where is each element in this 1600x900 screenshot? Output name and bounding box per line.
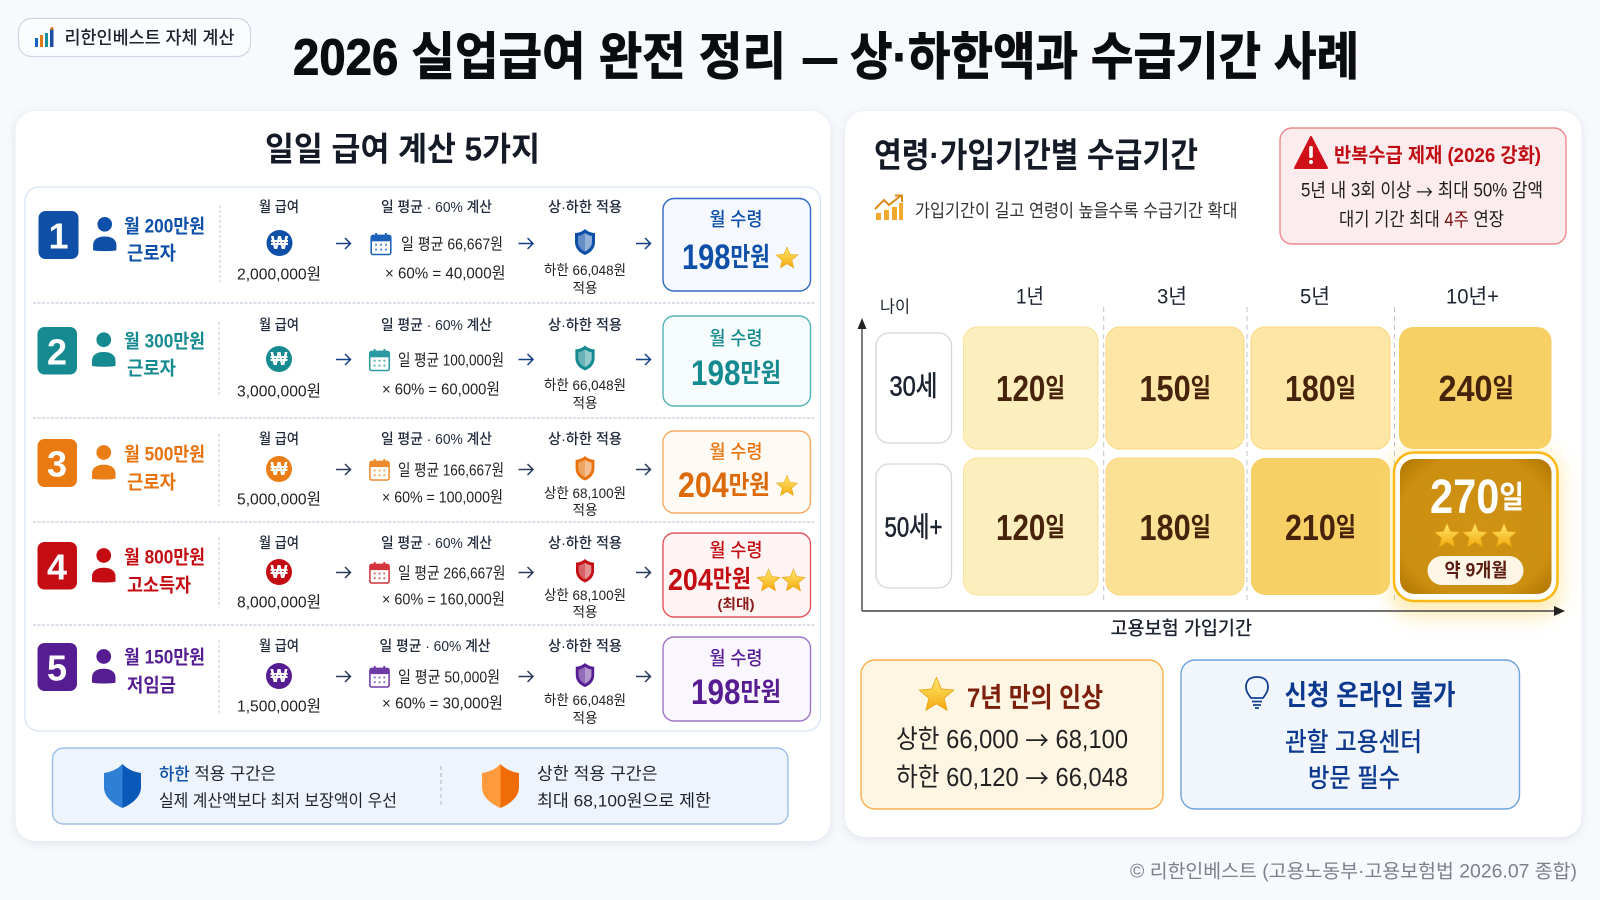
- daily average: [370, 638, 503, 712]
- three stars: [1435, 523, 1516, 547]
- daily average: × 60% = 60,000원: [382, 380, 500, 398]
- monthly pay: 월 급여: [259, 431, 299, 448]
- worker label: [124, 646, 205, 696]
- callout: repeat claim sanctions: 반복수급 제재 (2026 강화): [1334, 144, 1541, 167]
- cell 30세 10년: 240일: [1438, 368, 1514, 408]
- icon: person: [92, 548, 116, 583]
- lower limit note: 실제 계산액보다 최저 보장액이 우선: [159, 792, 397, 810]
- daily average: 일 평균 66,667원: [401, 236, 503, 254]
- monthly pay: 월 급여: [259, 535, 299, 552]
- daily average: 일 평균 · 60% 계산: [380, 638, 490, 655]
- limit applied: 상·하한 적용: [548, 317, 622, 334]
- result box: 월 수령: [710, 540, 762, 562]
- number badge 5: 5: [47, 648, 67, 688]
- limit applied: 하한 66,048원: [544, 262, 626, 278]
- result box: 월 수령: [710, 328, 762, 350]
- icon: star: [919, 678, 954, 710]
- age row 30: 30세: [890, 370, 938, 402]
- icon: person: [92, 649, 116, 684]
- limit applied: 상·하한 적용: [548, 431, 622, 448]
- monthly pay: ₩: [271, 233, 288, 253]
- result box: 198만원: [682, 238, 770, 276]
- panel: benefit duration: [845, 111, 1582, 837]
- monthly pay: [237, 431, 321, 508]
- limit applied: 적용: [572, 604, 598, 620]
- icon: orange shield: [482, 764, 519, 808]
- cell 30세 3년: 150일: [1140, 368, 1211, 408]
- callout: repeat claim sanctions: [1280, 128, 1566, 244]
- callout: repeat claim sanctions: 대기 기간 최대 4주 연장: [1339, 208, 1504, 230]
- number badge 4: [38, 542, 77, 590]
- daily average: [370, 535, 506, 608]
- lower limit note: [159, 764, 397, 810]
- worker label: 월 150만원: [124, 646, 205, 668]
- subtitle: 가입기간이 길고 연령이 높을수록 수급기간 확대: [915, 201, 1238, 221]
- arrow: [518, 464, 533, 475]
- worker label: [124, 330, 205, 380]
- cell 50세 3년: [1106, 458, 1244, 595]
- row 2: [33, 316, 814, 418]
- worker label: 월 800만원: [124, 546, 205, 568]
- column headers: 10년+: [1446, 286, 1499, 308]
- daily average: × 60% = 160,000원: [382, 590, 505, 608]
- callout: first raise in 7 years: 상한 66,000 → 68,100: [896, 720, 1128, 758]
- column headers: [1016, 286, 1499, 308]
- cell 50세 1년: 120일: [996, 506, 1065, 548]
- source badge: [18, 18, 250, 56]
- limit applied: 적용: [572, 710, 598, 726]
- monthly pay: 월 급여: [259, 199, 299, 216]
- callout: no online application: 신청 온라인 불가: [1284, 680, 1456, 710]
- row 3: [33, 431, 814, 522]
- arrow: [518, 567, 533, 578]
- result box: 198만원: [691, 354, 781, 392]
- arrow: [336, 238, 350, 249]
- callout: first raise in 7 years: 하한 60,120 → 66,048: [896, 758, 1128, 796]
- limit applied: 상·하한 적용: [548, 535, 622, 552]
- monthly pay: 월 급여: [259, 317, 299, 334]
- age row 50: [876, 464, 952, 588]
- upper limit note: 상한 적용 구간은: [537, 764, 658, 784]
- daily average: × 60% = 30,000원: [382, 694, 503, 712]
- monthly pay: [237, 638, 321, 716]
- daily average: 일 평균 · 60% 계산: [381, 535, 492, 552]
- cell 50세 1년: [964, 458, 1098, 595]
- limit applied: [544, 638, 626, 726]
- daily average: 일 평균 50,000원: [398, 668, 500, 686]
- number badge 5: [38, 643, 77, 691]
- heading: daily benefit calculation: 일일 급여 계산 5가지: [265, 130, 540, 168]
- daily average: [370, 317, 504, 398]
- age row 50: 50세+: [884, 512, 942, 542]
- daily average: 일 평균 · 60% 계산: [381, 199, 492, 216]
- cell 30세 1년: 120일: [996, 368, 1065, 408]
- number badge 1: [38, 211, 78, 259]
- cell 30세 5년: 180일: [1285, 368, 1356, 408]
- callout: no online application: [1181, 660, 1520, 809]
- icon: person: [93, 217, 116, 251]
- worker label: [124, 444, 205, 494]
- result box: 204만원: [668, 562, 751, 596]
- calculation table frame: [25, 187, 820, 731]
- upper limit note: 최대 68,100원으로 제한: [537, 792, 711, 810]
- footer source: © 리한인베스트 (고용노동부·고용보험법 2026.07 종합): [1130, 860, 1577, 882]
- highlighted cell 50세 10년: [1389, 448, 1562, 618]
- icon: growth chart: [875, 196, 903, 220]
- icon: light bulb: [1246, 677, 1268, 708]
- limit applied: 적용: [572, 502, 598, 518]
- number badge 3: [38, 439, 77, 487]
- cell 30세 10년: [1399, 327, 1552, 449]
- result box: [663, 637, 810, 721]
- result box: 월 수령: [710, 648, 762, 670]
- limit applied: [544, 535, 626, 620]
- axes: [858, 318, 1565, 616]
- monthly pay: 월 급여: [259, 638, 299, 655]
- limit applied: 하한 66,048원: [544, 692, 626, 708]
- limit applied: [544, 199, 626, 296]
- limit applied: 상한 68,100원: [544, 587, 626, 603]
- limit applied: [544, 431, 626, 518]
- arrow: [336, 567, 350, 578]
- callout: first raise in 7 years: 7년 만의 인상: [967, 683, 1103, 713]
- arrow: [636, 464, 650, 475]
- title: —: [803, 28, 837, 86]
- highlighted cell 50세 10년: 270일: [1430, 470, 1524, 524]
- number badge 2: 2: [47, 332, 67, 372]
- row 1: [33, 198, 814, 303]
- daily average: [371, 199, 506, 282]
- about 9 months pill: [1428, 556, 1524, 585]
- worker label: 월 500만원: [124, 444, 205, 466]
- daily average: 일 평균 266,667원: [398, 564, 506, 582]
- daily average: [370, 431, 504, 506]
- result box: [663, 198, 810, 291]
- result box: (최대): [718, 596, 754, 612]
- monthly pay: [237, 317, 321, 400]
- axis label: insurance period: 고용보험 가입기간: [1110, 618, 1252, 640]
- daily average: 일 평균 · 60% 계산: [381, 317, 492, 334]
- monthly pay: 2,000,000원: [237, 266, 321, 284]
- worker label: 월 300만원: [124, 330, 205, 352]
- icon: person: [92, 445, 116, 480]
- column headers: 5년: [1300, 286, 1330, 308]
- monthly pay: ₩: [270, 459, 288, 479]
- worker label: [124, 546, 205, 596]
- title: 2026 실업급여 완전 정리: [293, 28, 786, 86]
- column headers: 3년: [1157, 286, 1187, 308]
- monthly pay: 1,500,000원: [237, 698, 321, 716]
- title: 상·하한액과 수급기간 사례: [850, 28, 1359, 86]
- heading: benefit duration: 연령·가입기간별 수급기간: [874, 137, 1198, 175]
- result box: 198만원: [691, 672, 781, 712]
- number badge 3: 3: [47, 444, 67, 484]
- callout: no online application: 관할 고용센터: [1285, 727, 1422, 757]
- duration matrix: [858, 286, 1565, 640]
- worker label: 고소득자: [127, 574, 191, 596]
- result box: 204만원: [678, 466, 770, 504]
- result box: 월 수령: [710, 208, 762, 230]
- arrow: [636, 238, 650, 249]
- callout: repeat claim sanctions: 5년 내 3회 이상 → 최대 50% 감액: [1301, 178, 1543, 204]
- number badge 4: 4: [47, 546, 67, 588]
- result box: [663, 316, 810, 406]
- worker label: [124, 216, 205, 264]
- daily average: × 60% = 100,000원: [382, 488, 503, 506]
- icon: person: [92, 332, 116, 367]
- cell 30세 3년: [1106, 327, 1244, 449]
- upper limit note: [537, 764, 711, 810]
- monthly pay: ₩: [270, 349, 288, 369]
- axis label: age: 나이: [880, 298, 910, 316]
- limit applied: 상한 68,100원: [544, 485, 626, 501]
- icon: bar chart: [35, 27, 54, 47]
- daily average: 일 평균 166,667원: [398, 462, 504, 480]
- limit applied: 하한 66,048원: [544, 377, 626, 393]
- number badge 1: 1: [48, 216, 69, 256]
- worker label: 근로자: [127, 242, 176, 264]
- legend callout: [52, 748, 788, 824]
- arrow: [636, 567, 650, 578]
- lower limit note: 하한 적용 구간은: [159, 764, 276, 784]
- source badge: 리한인베스트 자체 계산: [64, 28, 234, 48]
- row 5: [38, 637, 810, 726]
- arrow: [636, 671, 650, 682]
- limit applied: 적용: [572, 280, 598, 296]
- arrow: [518, 238, 533, 249]
- title: [293, 28, 1359, 86]
- monthly pay: 8,000,000원: [237, 594, 321, 612]
- monthly pay: 3,000,000원: [237, 382, 321, 400]
- limit applied: [544, 317, 626, 411]
- cell 50세 3년: 180일: [1140, 506, 1211, 548]
- callout: first raise in 7 years: [861, 660, 1163, 809]
- panel: daily benefit calculation: [16, 111, 830, 841]
- daily average: × 60% = 40,000원: [385, 264, 506, 282]
- worker label: 저임금: [127, 674, 176, 696]
- icon: blue shield: [104, 764, 141, 808]
- cell 30세 1년: [964, 327, 1098, 449]
- result box: [663, 431, 810, 513]
- result box: [663, 533, 810, 617]
- cell 30세 5년: [1251, 327, 1390, 449]
- limit applied: 상·하한 적용: [548, 638, 622, 655]
- arrow: [336, 354, 350, 365]
- worker label: 월 200만원: [124, 216, 205, 238]
- limit applied: 상·하한 적용: [548, 199, 622, 216]
- monthly pay: [237, 199, 321, 284]
- monthly pay: ₩: [270, 562, 288, 582]
- number badge 2: [38, 327, 77, 374]
- callout: no online application: 방문 필수: [1308, 763, 1400, 793]
- age row 30: [876, 333, 952, 443]
- result box: 월 수령: [710, 441, 762, 463]
- worker label: 근로자: [127, 472, 176, 494]
- monthly pay: ₩: [270, 666, 288, 686]
- arrow: [518, 671, 533, 682]
- cell 50세 5년: 210일: [1285, 506, 1356, 548]
- worker label: 근로자: [127, 358, 176, 380]
- about 9 months pill: 약 9개월: [1444, 560, 1508, 582]
- arrow: [636, 354, 650, 365]
- icon: warning: [1295, 137, 1327, 168]
- arrow: [336, 671, 350, 682]
- monthly pay: 5,000,000원: [237, 490, 321, 508]
- arrow: [336, 464, 350, 475]
- daily average: 일 평균 100,000원: [398, 352, 504, 370]
- daily average: 일 평균 · 60% 계산: [381, 431, 492, 448]
- row 4: [33, 533, 814, 625]
- monthly pay: [237, 535, 321, 612]
- limit applied: 적용: [572, 395, 598, 411]
- column headers: 1년: [1016, 286, 1044, 308]
- cell 50세 5년: [1251, 458, 1390, 595]
- arrow: [518, 354, 533, 365]
